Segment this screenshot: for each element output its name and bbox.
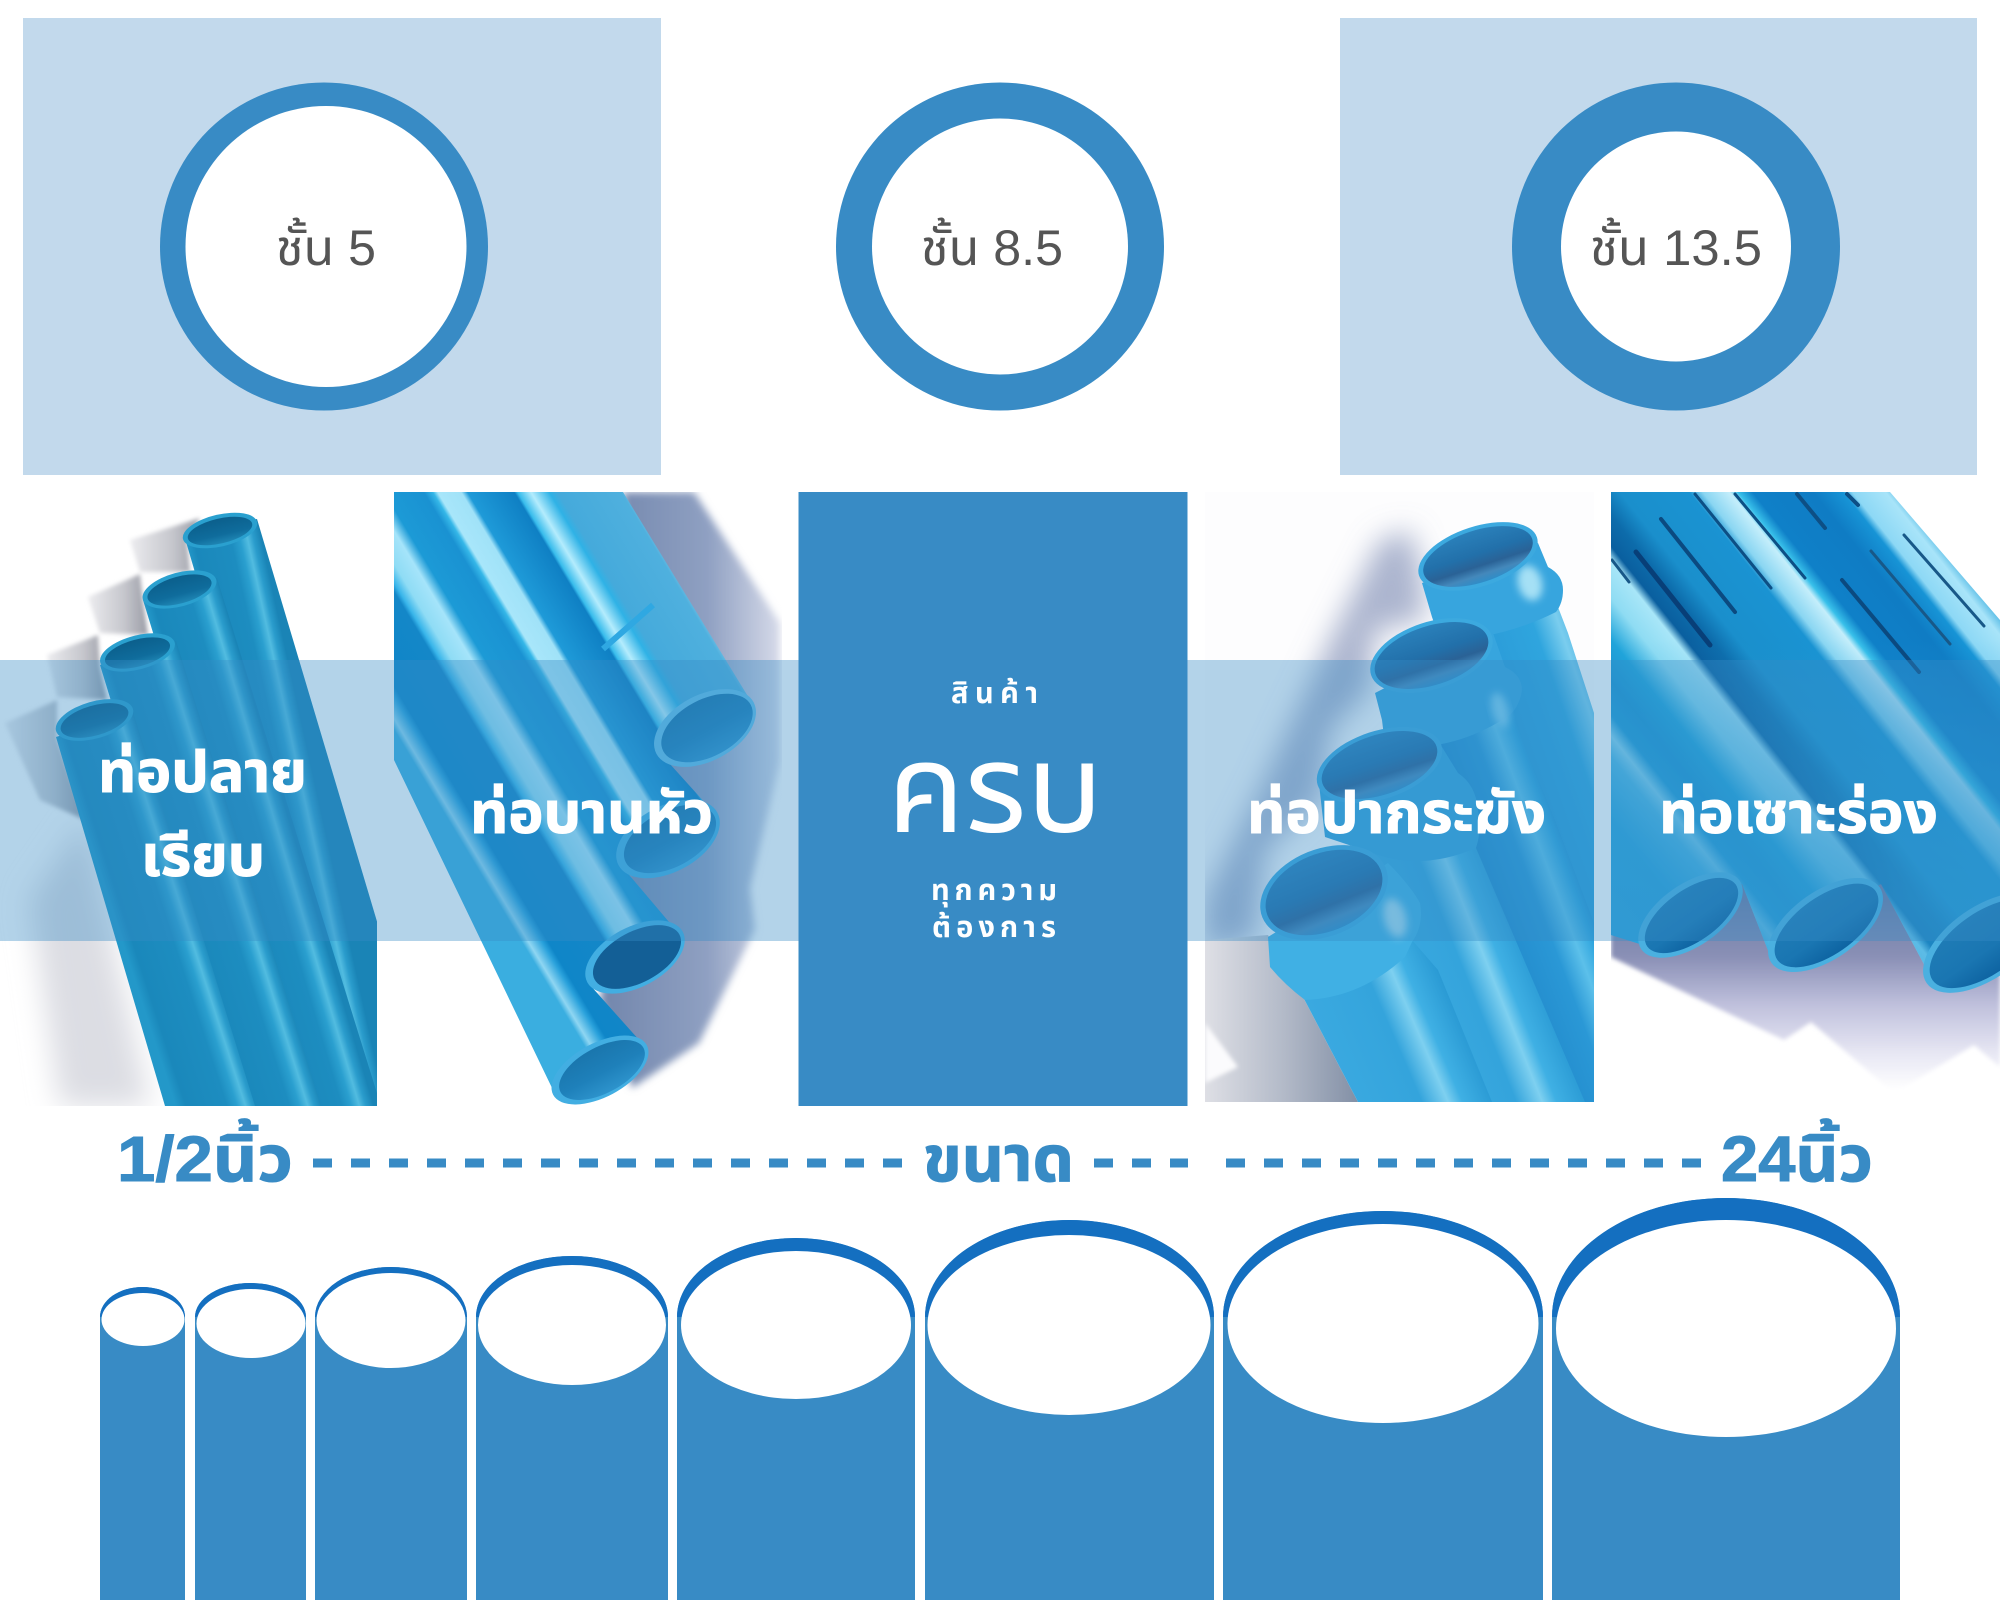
- label: plain-end pipe: ท่อปลาย: [98, 740, 307, 805]
- photo: rubber-ring socket pipes: [1205, 492, 1594, 1102]
- photo: belled-end pipes: [394, 492, 780, 1119]
- label: belled-end pipe: ท่อบานหัว: [470, 781, 713, 846]
- pipe 5: [677, 1238, 915, 1600]
- text: ต้องการ: ต้องการ: [932, 912, 1056, 944]
- label: class 8.5: ชั้น 8.5: [921, 217, 1063, 276]
- pipe 1: [100, 1287, 185, 1600]
- label: socket pipe: ท่อปากระฆัง: [1247, 781, 1546, 846]
- panel: centre message: [798, 492, 1188, 1106]
- dashes: left run: [313, 1158, 905, 1168]
- panel: right class background: [1340, 18, 1977, 475]
- label: plain-end pipe: [98, 740, 307, 889]
- text: 1/2 inch: 1/2นิ้ว: [117, 1118, 293, 1195]
- label: class 5: ชั้น 5: [276, 217, 376, 276]
- text: 24 inch: 24นิ้ว: [1721, 1118, 1873, 1195]
- pipe 8: [1552, 1198, 1900, 1600]
- text: ครบ: ครบ: [887, 721, 1103, 859]
- slits in the pipe wall: [1612, 494, 1984, 672]
- third pipe: [1360, 848, 1585, 1102]
- band: translucent label strip: [0, 660, 2000, 941]
- panel: left class background: [23, 18, 661, 475]
- back pipe: [1493, 608, 1594, 923]
- text: ทุกความ: ทุกความ: [931, 875, 1057, 907]
- ring: class 5: [160, 82, 488, 410]
- pipe 2: [195, 1283, 306, 1600]
- label: slotted pipe: ท่อเซาะร่อง: [1659, 781, 1938, 846]
- text: สินค้า: สินค้า: [951, 678, 1038, 710]
- size range heading: [117, 1118, 1873, 1195]
- label: plain-end pipe: เรียบ: [141, 824, 265, 889]
- ring: class 13.5: [1512, 82, 1840, 410]
- pipe 7: [1223, 1211, 1543, 1600]
- photo: plain-end pipes: [7, 512, 377, 1106]
- second pipe: [1441, 722, 1594, 1042]
- photo: slotted pipes: [1611, 492, 2000, 1093]
- ring: class 8.5: [836, 82, 1164, 410]
- pipe 3: [315, 1267, 467, 1600]
- pipe 4: [476, 1256, 668, 1600]
- front pipe: [1304, 956, 1492, 1102]
- dashes: right run: [1094, 1158, 1702, 1168]
- pipe 6: [925, 1220, 1214, 1600]
- pipe cross-sections: 1/2 to 24 inch: [100, 1198, 1900, 1600]
- label: class 13.5: ชั้น 13.5: [1590, 217, 1762, 276]
- text: size: ขนาด: [923, 1123, 1074, 1195]
